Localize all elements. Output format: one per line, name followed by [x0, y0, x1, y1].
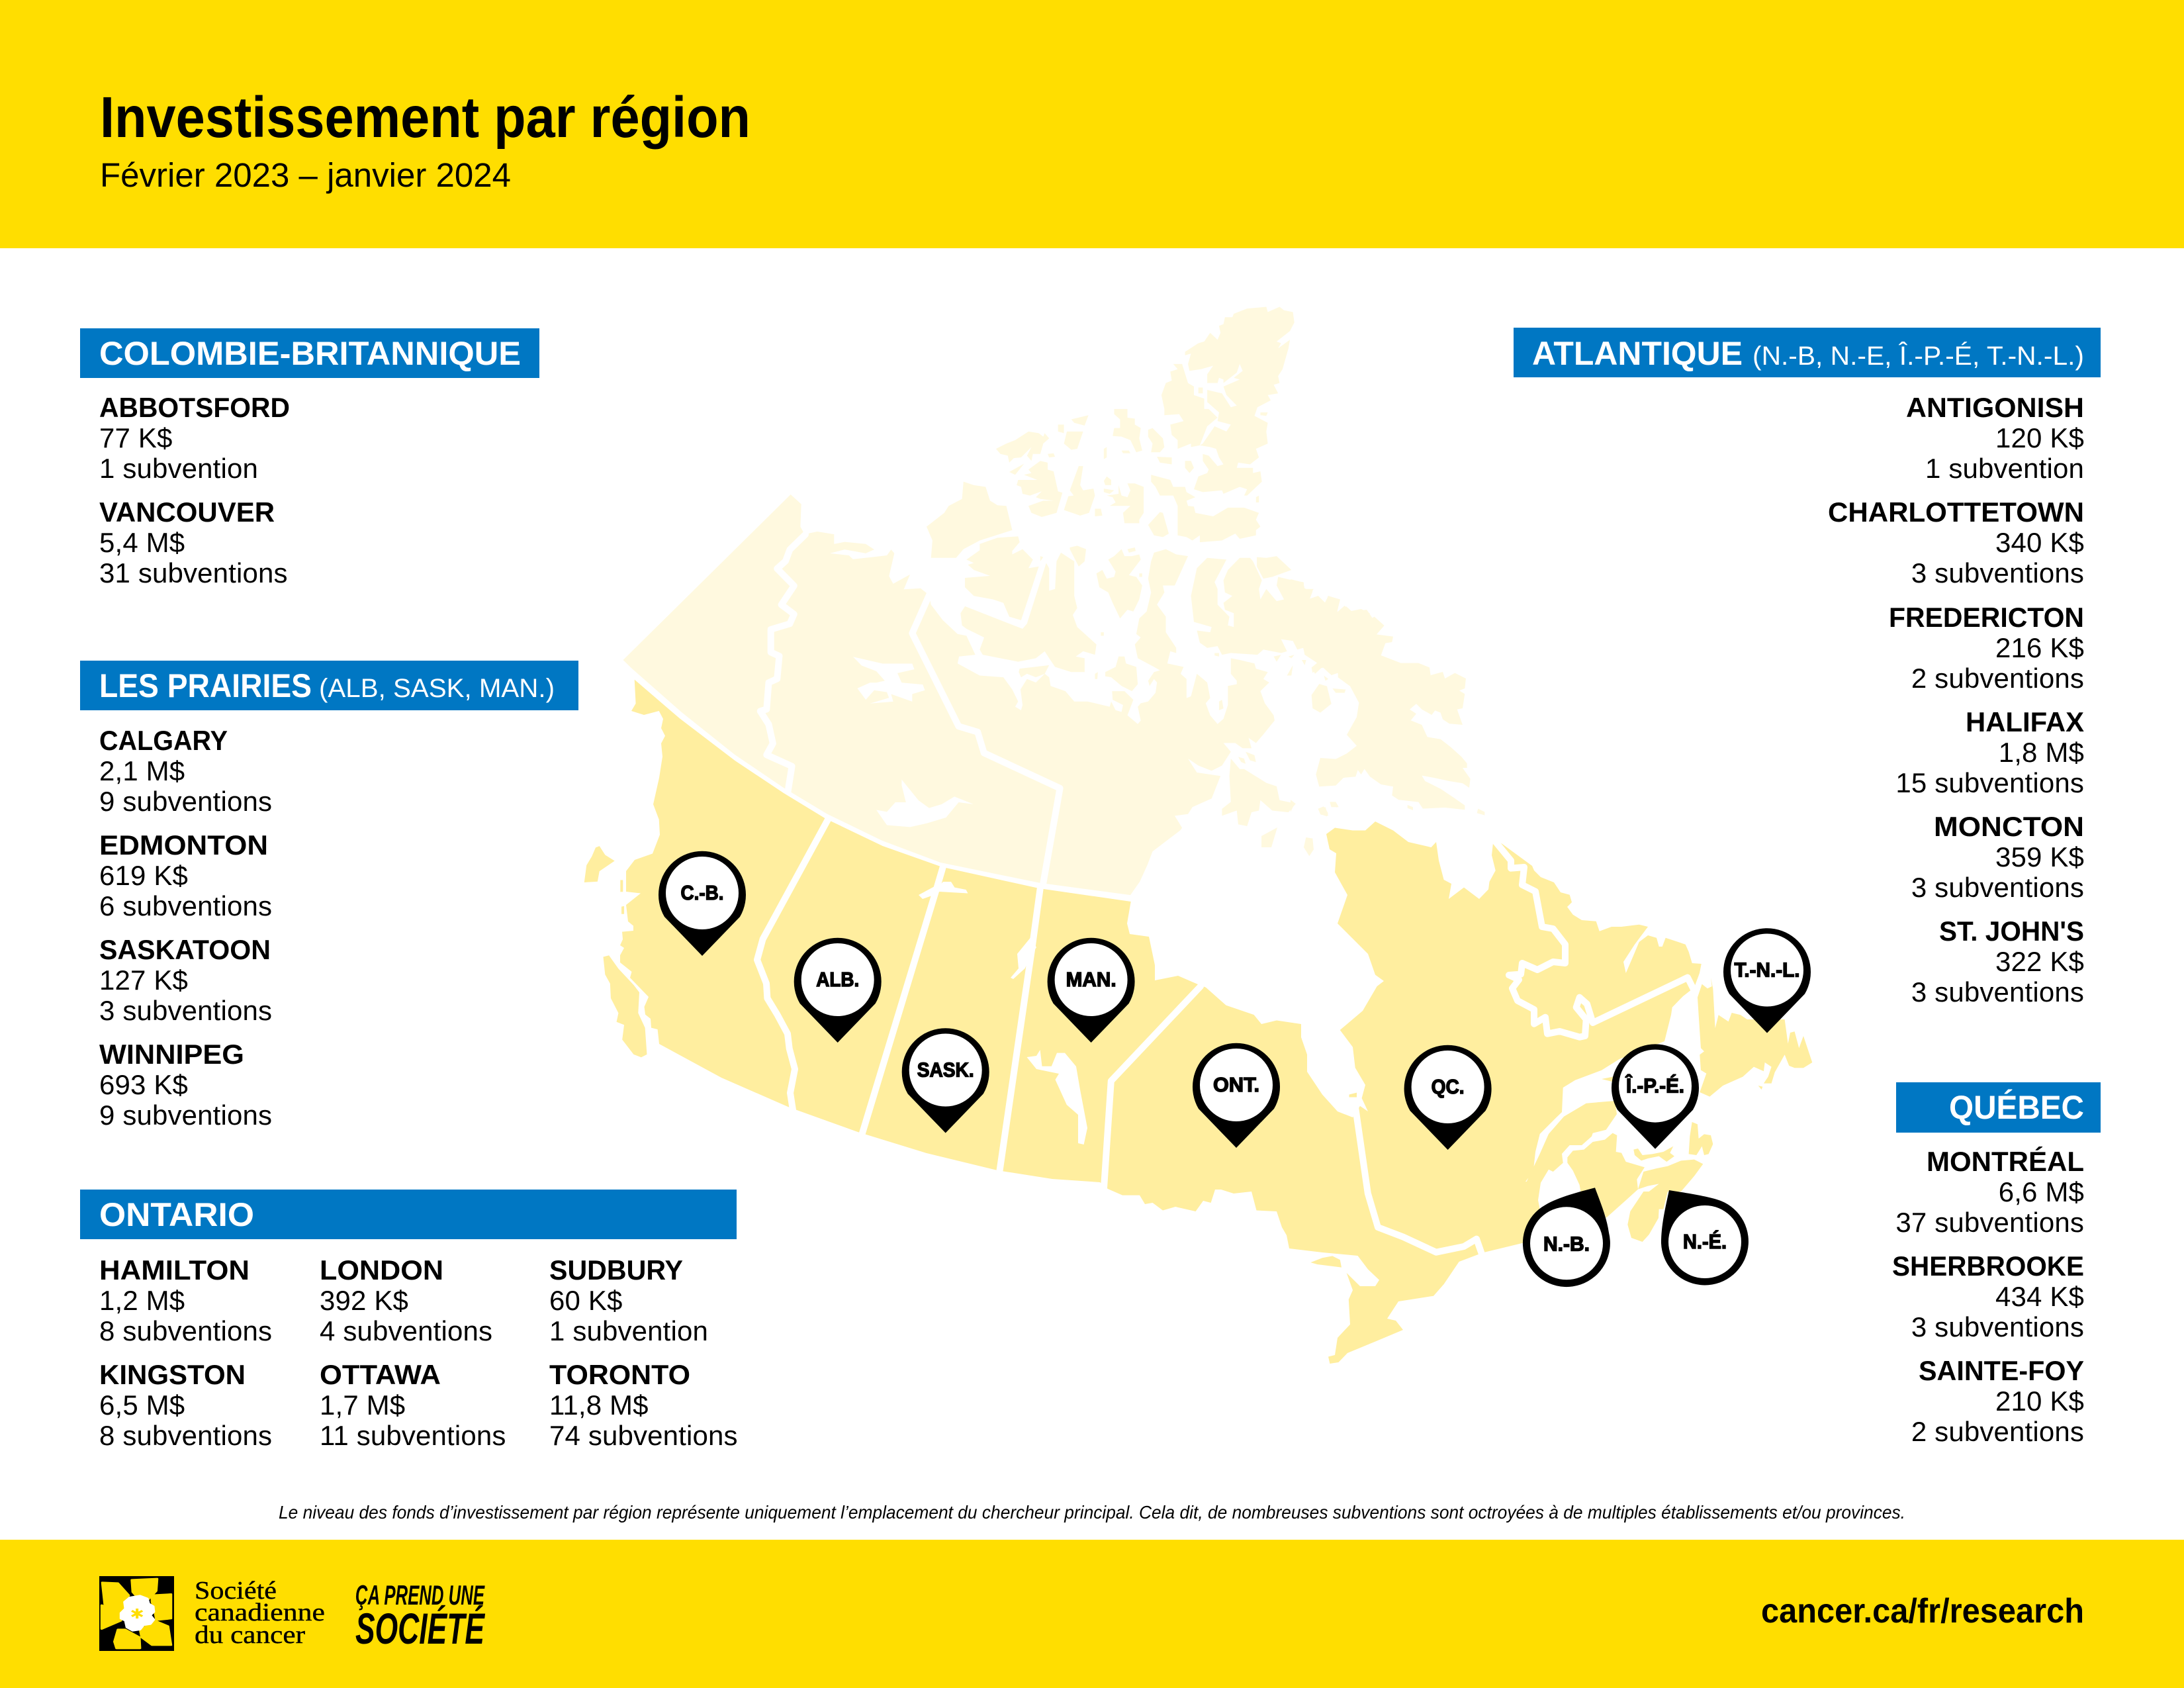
- city: Hamilton: [99, 1254, 272, 1346]
- city: Sudbury: 1 subvention: [549, 1315, 708, 1346]
- city: Saskatoon: SASKATOON: [99, 934, 271, 965]
- heading: Les Prairies: [80, 661, 578, 710]
- logo: daffodil: [99, 1576, 174, 1651]
- city: Abbotsford: 77 K$: [99, 422, 173, 453]
- city: Kingston: [99, 1359, 272, 1451]
- city: Fredericton: [1889, 602, 2084, 694]
- city: Halifax: [1895, 706, 2084, 798]
- city: Abbotsford: 1 subvention: [99, 453, 258, 484]
- city: Toronto: TORONTO: [549, 1359, 690, 1390]
- panel: Colombie-Britannique: [80, 328, 539, 588]
- logo text: Société canadienne du cancer: [195, 1577, 325, 1649]
- pin: N.-B.: [1523, 1188, 1610, 1287]
- city: Charlottetown: 340 K$: [1995, 527, 2084, 558]
- city: Antigonish: [1906, 392, 2084, 484]
- panel: Québec: [1892, 1082, 2101, 1447]
- Vancouver Island and BC islands: [584, 846, 647, 1057]
- city: Charlottetown: CHARLOTTETOWN: [1828, 496, 2084, 528]
- logo text: Société canadienne du cancer: du cancer: [195, 1621, 305, 1649]
- pin: T.-N.-L.: T.-N.-L.: [1734, 959, 1800, 981]
- city: Vancouver: 31 subventions: [99, 557, 288, 588]
- city: Moncton: MONCTON: [1934, 811, 2084, 842]
- pin: SASK.: SASK.: [917, 1058, 974, 1082]
- city: Calgary: CALGARY: [99, 725, 228, 756]
- city: Vancouver: [99, 496, 288, 588]
- logo text: Société canadienne du cancer: canadienne: [195, 1599, 325, 1626]
- pin: N.-É.: [1661, 1190, 1749, 1285]
- lake: Great Slave: [876, 780, 974, 827]
- subtitle: Février 2023 – janvier 2024: [100, 156, 511, 194]
- city: Hamilton: 1,2 M$: [99, 1285, 185, 1316]
- lake: Athabasca: [919, 882, 968, 899]
- city: Kingston: 8 subventions: [99, 1420, 272, 1451]
- provincial borders and lakes: [757, 820, 1694, 1254]
- city: Calgary: [99, 725, 272, 817]
- pin: N.-É.: N.-É.: [1683, 1230, 1727, 1253]
- provinces (dark): [584, 680, 1812, 1364]
- city: Edmonton: EDMONTON: [99, 829, 268, 861]
- city: Moncton: 359 K$: [1995, 841, 2084, 872]
- city: Sherbrooke: 434 K$: [1995, 1281, 2084, 1312]
- city: Montréal: 37 subventions: [1895, 1207, 2084, 1238]
- panel: Atlantique: [1514, 328, 2101, 1008]
- city: Halifax: HALIFAX: [1966, 706, 2084, 737]
- pin: C.-B.: C.-B.: [680, 881, 724, 904]
- heading: Ontario: [80, 1190, 737, 1239]
- city: Calgary: 9 subventions: [99, 786, 272, 817]
- city: Winnipeg: WINNIPEG: [99, 1039, 244, 1070]
- city: London: LONDON: [320, 1254, 443, 1286]
- city: Winnipeg: [99, 1039, 272, 1131]
- heading: Québec: [1896, 1082, 2101, 1133]
- Newfoundland: [1698, 978, 1812, 1097]
- city: Toronto: 11,8 M$: [549, 1389, 649, 1421]
- Manitoulin and James Bay islands: [1310, 1093, 1357, 1268]
- city: St. John's: ST. JOHN'S: [1939, 915, 2084, 947]
- footnote: Le niveau des fonds d’investissement par région représente uniquement l’emplacement du chercheur principal. Cela dit, de nombreuses subventions sont octroyées à de multiples établissements et/ou provinces.: [279, 1502, 1905, 1523]
- city: Kingston: KINGSTON: [99, 1359, 246, 1390]
- city: Sherbrooke: 3 subventions: [1911, 1311, 2084, 1342]
- city: Abbotsford: [99, 392, 290, 484]
- city: Ottawa: OTTAWA: [320, 1359, 441, 1390]
- city: Sainte-Foy: SAINTE-FOY: [1919, 1355, 2084, 1386]
- heading: Colombie-Britannique: COLOMBIE-BRITANNIQUE: [99, 335, 521, 372]
- city: Hamilton: 8 subventions: [99, 1315, 272, 1346]
- pin: Î.-P.-É.: [1612, 1044, 1699, 1149]
- city: Sudbury: 60 K$: [549, 1285, 623, 1316]
- city: St. John's: [1911, 915, 2084, 1008]
- city: Antigonish: 1 subvention: [1925, 453, 2084, 484]
- title: Investissement par région: [100, 85, 751, 150]
- footer band: [0, 1540, 2184, 1688]
- territory borders: [760, 534, 1060, 884]
- city: Saskatoon: 127 K$: [99, 964, 188, 996]
- city: Antigonish: ANTIGONISH: [1906, 392, 2084, 423]
- city: Vancouver: 5,4 M$: [99, 527, 185, 558]
- logo text: Société canadienne du cancer: Société: [195, 1577, 277, 1605]
- city: Sudbury: SUDBURY: [549, 1254, 683, 1286]
- pin: Î.-P.-É.: Î.-P.-É.: [1625, 1074, 1684, 1098]
- city: Sainte-Foy: 2 subventions: [1911, 1416, 2084, 1447]
- city: Saskatoon: 3 subventions: [99, 995, 272, 1026]
- city: Edmonton: 6 subventions: [99, 890, 272, 921]
- city: Edmonton: 619 K$: [99, 860, 188, 891]
- city: Toronto: [549, 1359, 738, 1451]
- panel: Les Prairies: [80, 661, 578, 1131]
- lake: Reindeer: [1011, 937, 1036, 979]
- city: St. John's: 3 subventions: [1911, 976, 2084, 1008]
- city: London: 392 K$: [320, 1285, 408, 1316]
- heading: Atlantique: (N.-B, N.-E, Î.-P.-É, T.-N.-L.): [1752, 341, 2084, 371]
- pin: QC.: [1404, 1045, 1492, 1150]
- heading: Atlantique: [1514, 328, 2101, 377]
- pin: ONT.: ONT.: [1213, 1073, 1259, 1096]
- heading: Québec: QUÉBEC: [1949, 1089, 2084, 1126]
- lake: Winnipeg: [1027, 1050, 1087, 1145]
- city: Edmonton: [99, 829, 272, 921]
- pin: SASK.: [902, 1028, 989, 1133]
- city: Halifax: 1,8 M$: [1999, 737, 2084, 768]
- city: Moncton: [1911, 811, 2084, 903]
- city: Fredericton: 2 subventions: [1911, 663, 2084, 694]
- city: Winnipeg: 693 K$: [99, 1069, 188, 1100]
- city: Hamilton: HAMILTON: [99, 1254, 250, 1286]
- city: Sainte-Foy: 210 K$: [1995, 1385, 2084, 1417]
- city: Fredericton: 216 K$: [1995, 632, 2084, 663]
- pin: QC.: QC.: [1432, 1075, 1465, 1098]
- website url: cancer.ca/fr/research: [1761, 1592, 2084, 1630]
- city: Ottawa: 11 subventions: [320, 1420, 506, 1451]
- slogan: Ça prend une société: ÇA PREND UNE: [355, 1579, 485, 1611]
- lake: Great Bear: [853, 657, 925, 704]
- slogan: Ça prend une société: SOCIÉTÉ: [355, 1604, 485, 1653]
- header band: [0, 0, 2184, 248]
- city: St. John's: 322 K$: [1995, 946, 2084, 977]
- city: Sudbury: [549, 1254, 708, 1346]
- city: Ottawa: [320, 1359, 506, 1451]
- pin: ONT.: [1193, 1043, 1280, 1148]
- city: Fredericton: FREDERICTON: [1889, 602, 2084, 633]
- city: Winnipeg: 9 subventions: [99, 1100, 272, 1131]
- city: Sherbrooke: SHERBROOKE: [1892, 1250, 2084, 1282]
- city: Saskatoon: [99, 934, 272, 1026]
- pin: MAN.: MAN.: [1066, 968, 1116, 991]
- city: Moncton: 3 subventions: [1911, 872, 2084, 903]
- city: Charlottetown: [1828, 496, 2084, 588]
- pin: C.-B.: [659, 851, 746, 956]
- city: Vancouver: VANCOUVER: [99, 496, 275, 528]
- city: London: 4 subventions: [320, 1315, 492, 1346]
- city: Kingston: 6,5 M$: [99, 1389, 185, 1421]
- pin: ALB.: [794, 938, 882, 1043]
- heading: Atlantique: ATLANTIQUE: [1532, 335, 1743, 372]
- city: Toronto: 74 subventions: [549, 1420, 738, 1451]
- city: Sainte-Foy: [1911, 1355, 2084, 1447]
- pin: ALB.: ALB.: [816, 968, 859, 991]
- heading: Colombie-Britannique: [80, 328, 539, 378]
- heading: Les Prairies: LES PRAIRIES: [99, 667, 312, 704]
- city: Calgary: 2,1 M$: [99, 755, 185, 786]
- city: Montréal: 6,6 M$: [1999, 1176, 2084, 1207]
- city: Antigonish: 120 K$: [1995, 422, 2084, 453]
- panel: Ontario: [80, 1190, 738, 1451]
- city: Abbotsford: ABBOTSFORD: [99, 392, 290, 423]
- pin: N.-B.: N.-B.: [1543, 1232, 1590, 1255]
- city: Halifax: 15 subventions: [1895, 767, 2084, 798]
- city: Sherbrooke: [1892, 1250, 2084, 1342]
- city: Ottawa: 1,7 M$: [320, 1389, 405, 1421]
- city: London: [320, 1254, 492, 1346]
- city: Montréal: MONTRÉAL: [1927, 1146, 2084, 1177]
- pin: MAN.: [1048, 938, 1135, 1043]
- pin: T.-N.-L.: [1723, 928, 1811, 1033]
- slogan: Ça prend une société: [355, 1579, 485, 1653]
- territories (pale): [623, 307, 1484, 895]
- Maritimes: [1567, 1076, 1762, 1242]
- city: Charlottetown: 3 subventions: [1911, 557, 2084, 588]
- city: Montréal: [1895, 1146, 2084, 1238]
- map of Canada: [584, 307, 1812, 1364]
- heading: Ontario: ONTARIO: [99, 1196, 254, 1233]
- heading: Les Prairies: (ALB, SASK, MAN.): [319, 674, 555, 703]
